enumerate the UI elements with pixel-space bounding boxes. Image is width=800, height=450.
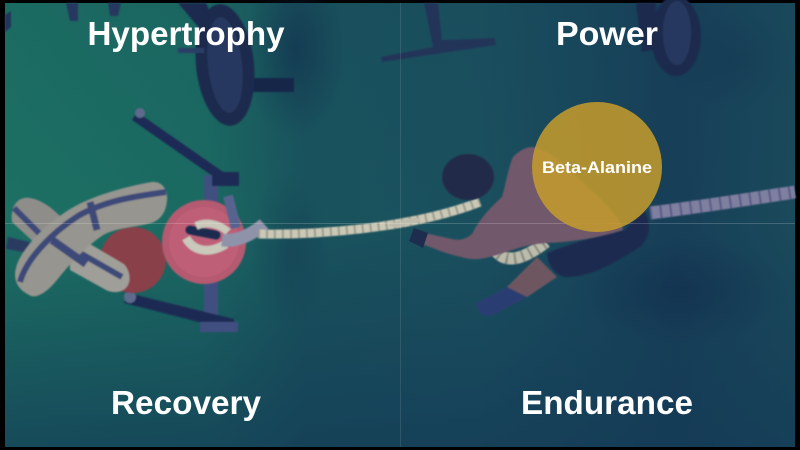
highlighted circle: Beta-Alanine <box>532 102 662 232</box>
athlete torso and arm <box>420 147 623 259</box>
equipment: top centre stand <box>381 3 496 62</box>
equipment: sled frame <box>6 108 239 332</box>
rope over left hand <box>390 219 420 226</box>
equipment: top right plate <box>636 0 701 76</box>
rope: coil under athlete and right section <box>494 192 795 259</box>
equipment: bumper plates <box>100 200 246 293</box>
equipment: sandbags <box>12 182 167 296</box>
athlete shorts <box>547 210 649 277</box>
athlete <box>409 147 649 316</box>
heading: Hypertrophy: Hypertrophy <box>88 15 285 52</box>
rope: knot and left section <box>186 196 480 250</box>
equipment: top left bars and bumper plate <box>5 1 294 129</box>
highlighted circle: Beta-Alanine: Beta-Alanine <box>542 158 652 177</box>
heading: Endurance: Endurance <box>521 384 693 421</box>
athlete head <box>442 154 494 200</box>
heading: Recovery: Recovery <box>111 384 262 421</box>
athlete leg and shoe <box>477 257 557 316</box>
athlete wrist wrap <box>409 228 428 248</box>
heading: Power: Power <box>556 15 658 52</box>
